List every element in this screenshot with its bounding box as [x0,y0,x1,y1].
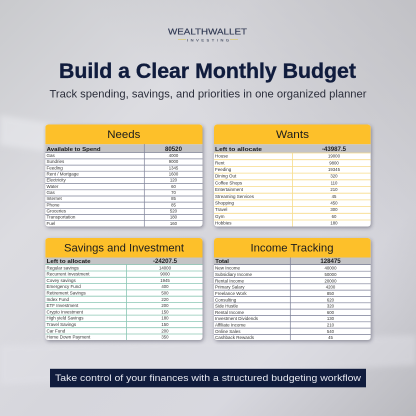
table rows: wants: 450 [330,200,338,206]
table rows: needs: Fuel [46,221,55,226]
table rows: savings and investment: 9000 [160,272,170,277]
callout banner: Take control of your finances with a structured budgeting workflow [55,373,361,384]
panel: needs [45,124,203,227]
table rows: savings and investment: 1945 [160,278,170,283]
table rows: needs: Feeding [46,165,63,170]
table rows: wants: House [215,154,229,159]
summary row: left to allocate: -24207.5 [153,258,178,265]
summary row: available to spend [45,144,202,153]
table rows: income tracking: Freelance Work [215,291,247,296]
table rows: savings and investment: Home Down Payment [46,335,91,340]
table rows: income tracking: Rental Income [215,278,245,283]
table rows: wants: 19000 [328,154,341,159]
table rows: income tracking: 600 [327,310,335,315]
table rows: income tracking: 540 [327,329,335,334]
table rows: wants: Rent [215,160,225,165]
table rows: wants: 210 [330,187,338,192]
table rows: savings and investment: 150 [161,322,169,327]
table rows: needs: 4000 [169,153,179,158]
panel: income tracking [214,238,371,341]
table rows: wants: 45 [332,194,337,199]
table rows: savings and investment: Emergency Fund [46,284,81,289]
table rows: savings and investment: Index Fund [46,297,70,302]
table rows: savings and investment: 200 [161,303,169,308]
table rows: wants: 110 [331,180,338,185]
table rows: savings and investment: 350 [161,335,169,340]
table rows: income tracking: 130 [327,316,335,321]
table rows: savings and investment: 14000 [159,265,172,270]
table rows: wants: 320 [330,174,338,179]
table rows: savings and investment: Car Fund [46,328,66,333]
table rows: income tracking: 320 [327,304,335,309]
summary row: left to allocate [214,144,371,153]
table rows: wants: Streaming Services [215,194,255,199]
table rows: savings and investment: Covey savings [46,278,77,283]
table rows: wants: 180 [330,221,338,226]
summary row: left to allocate [45,258,202,265]
table rows: wants: Travel [215,207,227,212]
table rows: income tracking: Side Hustle [215,304,239,309]
table rows: savings and investment: High yield Savings [46,316,84,321]
summary row: total [214,258,371,265]
table rows: wants: Coffee Shops [215,180,243,185]
table rows: needs [45,144,203,227]
table rows: needs: Electricity [46,178,67,183]
table rows: income tracking: 4200 [326,285,336,290]
table rows: needs: 85 [171,196,176,201]
table rows: income tracking: Cashback Rewards [215,335,255,340]
table rows: needs: 9000 [169,159,179,164]
subtitle: Track spending, savings, and priorities in one organized planner [50,89,367,101]
table rows: wants: Gym [215,214,225,219]
heading: needs [45,124,202,144]
table rows: needs: 60 [171,184,176,189]
table rows: income tracking: New Income [215,266,241,271]
table rows: needs: Gas [46,153,56,158]
table rows: savings and investment: 400 [161,284,169,289]
table rows: savings and investment: ETF Investment [46,303,79,308]
summary row: left to allocate: Left to allocate [47,259,91,265]
table rows: income tracking: Primary Salary [215,285,245,290]
heading: income tracking [214,238,371,258]
table rows: needs: Groceries [46,208,67,214]
heading: savings and investment: Savings and Investment [64,243,184,255]
table rows: income tracking: Online Sales [215,329,241,334]
table rows: needs: Rent / Mortgage [46,171,79,176]
table rows: savings and investment: 150 [161,309,169,314]
table rows: needs: Water [46,184,59,189]
table rows: needs: Transportation [46,215,76,220]
table rows: needs: Phone [46,202,60,207]
heading: savings and investment [45,238,202,258]
table rows: savings and investment: Retirement Savings [46,290,87,296]
table rows: needs: 1600 [169,171,179,176]
table rows: income tracking: Rental Income [215,310,245,315]
table rows: savings and investment: 500 [161,290,169,296]
callout banner [50,369,366,387]
table rows: income tracking: Investment Dividends [215,316,259,321]
summary row: left to allocate: Left to allocate [215,147,263,153]
table rows: savings and investment: 200 [161,328,169,333]
table rows: needs: 70 [171,190,176,195]
table rows: savings and investment: 220 [161,297,169,302]
table rows: needs: 160 [170,221,178,226]
table rows: needs: Gas [46,190,56,195]
table rows: needs: 1345 [169,165,179,170]
table rows: wants: Hobbies [215,221,232,226]
table rows: wants: 300 [330,207,338,212]
title: Build a Clear Monthly Budget [59,58,356,83]
table rows: wants: Dining Out [215,174,237,179]
table rows: income tracking: 850 [327,291,335,296]
panel: savings and investment [45,238,203,341]
table rows: savings and investment: Recurrent Investment [46,272,90,277]
logo: WealthWallet Investing [168,28,247,42]
table rows: wants: 19345 [328,167,341,172]
table rows: needs: 120 [170,178,178,183]
logo: WealthWallet Investing: INVESTING [187,37,229,42]
table rows: income tracking: 45 [328,335,333,340]
table rows: needs: 85 [171,202,176,207]
table rows: wants: Entertainment [215,187,244,192]
table rows: wants [214,153,371,227]
table rows: savings and investment: Crypto Investment [46,309,84,314]
table rows: savings and investment [45,264,203,341]
summary row: available to spend: Available to Spend [47,147,101,153]
table rows: wants: 60 [332,214,337,219]
table rows: income tracking: 50000 [325,272,337,277]
summary row: total: 128475 [320,258,341,265]
table rows: income tracking: 20000 [325,278,337,283]
table rows: wants: Feeding [215,167,232,172]
table rows: needs: 520 [170,208,178,214]
table rows: income tracking: 40000 [325,266,337,271]
table rows: income tracking: 620 [327,297,335,302]
heading: needs: Needs [107,129,140,141]
table rows: needs: 180 [170,215,178,220]
heading: wants: Wants [276,129,309,141]
table rows: needs: Sundries [46,159,65,164]
table rows: income tracking: Affiliate Income [215,323,246,328]
table rows: savings and investment: Regular savings [46,265,80,270]
table rows: needs: Internet [46,196,63,201]
table rows: savings and investment: Travel Savings [46,322,77,327]
table rows: wants: 9800 [329,160,339,165]
heading: wants [214,124,371,144]
table rows: income tracking: 210 [327,323,335,328]
panel: wants [214,124,371,227]
summary row: total: Total [215,259,229,265]
table rows: wants: Shopping [215,200,235,206]
heading: income tracking: Income Tracking [250,243,334,255]
logo: WealthWallet Investing: WEALTHWALLET [168,28,247,37]
table rows: savings and investment: 180 [161,316,169,321]
summary row: available to spend: 80520 [165,146,183,153]
summary row: left to allocate: -43987.5 [322,146,347,153]
table rows: income tracking [214,258,371,341]
table rows: income tracking: Consulting [215,297,237,302]
table rows: income tracking: Subsidiary Income [215,272,253,277]
